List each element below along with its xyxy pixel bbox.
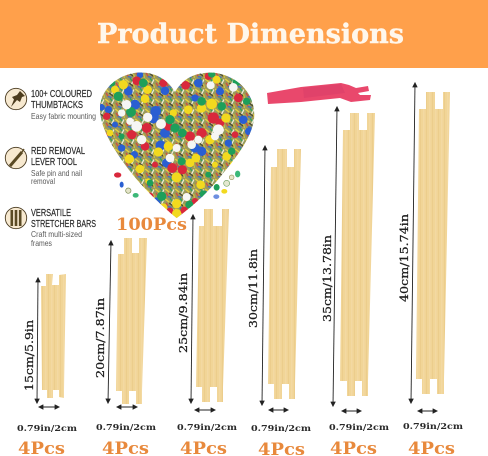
feature: versatile stretcher bars: VERSATILE [31, 208, 71, 219]
stretcher bar 30cm: 30cm/11.8in [247, 249, 260, 328]
100Pcs label: 100Pcs [116, 215, 187, 235]
stretcher bar 20cm: 20cm/7.87in [94, 298, 107, 378]
stretcher bar 25cm: 25cm/9.84in [177, 273, 190, 353]
feature: red removal lever tool: LEVER TOOL [31, 157, 77, 168]
title: Product Dimensions [97, 19, 404, 50]
stretcher bar 15cm [17, 274, 77, 456]
stretcher bar 30cm [247, 146, 311, 456]
feature: versatile stretcher bars: Craft multi-sized [31, 229, 82, 239]
stretcher bar 20cm [94, 238, 156, 456]
stretcher bar 25cm: 0.79in/2cm [177, 423, 237, 433]
feature: coloured thumbtacks [5, 88, 96, 121]
stray thumbtacks [114, 171, 240, 199]
red removal lever tool [267, 83, 371, 104]
icon: stretcher bars [5, 207, 27, 229]
icon: lever tool [5, 147, 27, 169]
stretcher bar 15cm: 15cm/5.9in [23, 320, 36, 391]
stretcher bar 40cm: 0.79in/2cm [403, 422, 463, 432]
stretcher bar 35cm [321, 107, 389, 456]
feature: coloured thumbtacks: 100+ COLOURED [31, 89, 92, 100]
feature: versatile stretcher bars [5, 207, 96, 248]
feature: red removal lever tool: Safe pin and nail [31, 168, 82, 178]
feature: coloured thumbtacks: THUMBTACKS [31, 100, 83, 111]
stretcher bar 40cm [398, 83, 463, 456]
header banner [0, 0, 488, 68]
stretcher bar 30cm: 0.79in/2cm [251, 424, 311, 434]
feature: coloured thumbtacks: Easy fabric mounting [31, 111, 96, 121]
icon: thumbtack [5, 88, 27, 110]
feature: red removal lever tool: RED REMOVAL [31, 146, 85, 157]
stretcher bar 35cm: 35cm/13.78in [321, 235, 334, 322]
stretcher bar 15cm: 0.79in/2cm [17, 424, 77, 434]
stretcher bar 25cm [177, 209, 237, 456]
feature: versatile stretcher bars: STRETCHER BARS [31, 219, 96, 230]
feature: versatile stretcher bars: frames [31, 238, 52, 248]
stretcher bar 35cm: 0.79in/2cm [329, 423, 389, 433]
stretcher bar 20cm: 0.79in/2cm [96, 423, 156, 433]
stretcher bar 40cm: 40cm/15.74in [398, 214, 411, 302]
feature: red removal lever tool [5, 146, 85, 186]
thumbtack heart [99, 71, 254, 218]
feature: red removal lever tool: removal [31, 176, 55, 186]
